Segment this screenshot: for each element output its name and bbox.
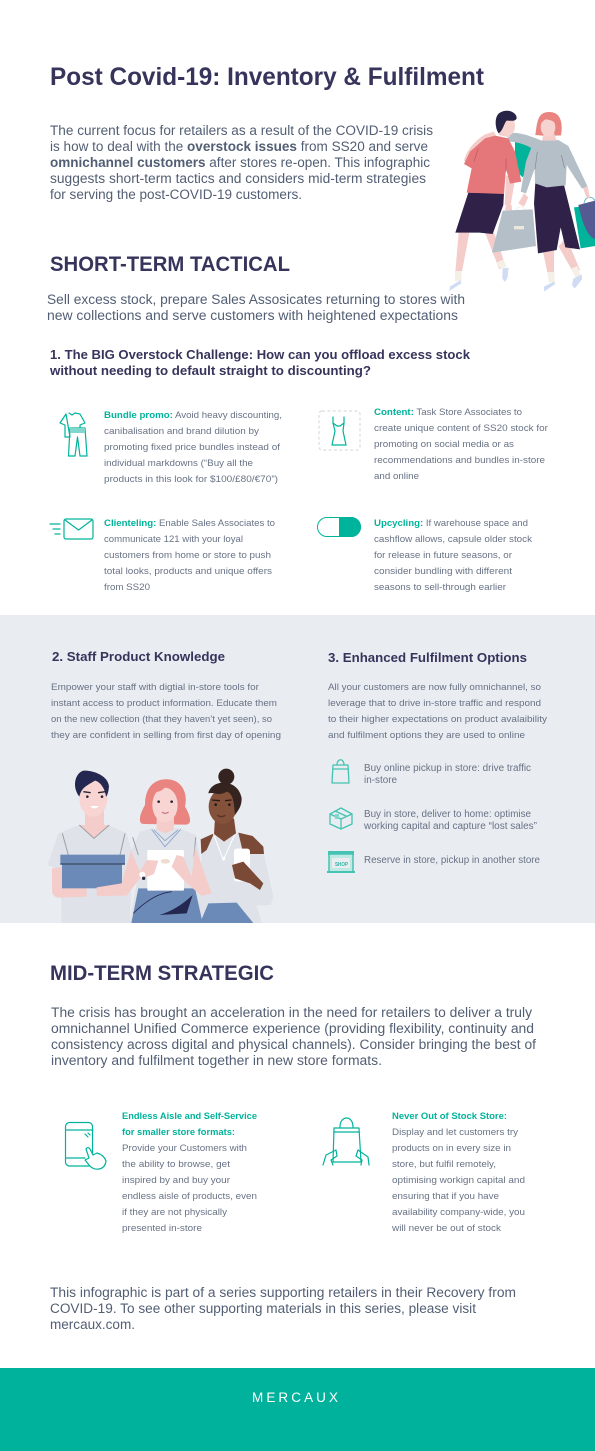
text: reserve in store: Reserve in store, pickup in another store (364, 855, 540, 866)
text: upcycling: seasons to sell-through earlier (374, 582, 506, 593)
text: buy online pickup in store: in-store (364, 775, 397, 786)
text: endless aisle: endless aisle of products, even (122, 1191, 257, 1202)
text: buy online pickup in store (364, 763, 531, 786)
man: arms and box (52, 867, 87, 898)
text: staff knowledge body: on the new collection (that they haven’t yet seen), so (51, 714, 272, 725)
woman's arms (518, 193, 528, 207)
woman on right: skirt (200, 903, 253, 923)
text: upcycling: cashflow allows, capsule older stock (374, 534, 532, 545)
text: upcycling: consider bundling with different (374, 566, 512, 577)
icon: shopping bag (332, 760, 349, 783)
intro text block: for serving the post-COVID-19 customers. (50, 187, 302, 202)
text: staff knowledge body (51, 682, 281, 741)
man's t-shirt (464, 136, 521, 194)
text: endless aisle: Endless Aisle and Self-Service (122, 1111, 257, 1122)
illustration: three staff members (47, 769, 273, 923)
text: bundle promo: individual markdowns (“Buy all the (104, 458, 253, 469)
closing note: mercaux.com. (50, 1317, 135, 1332)
heading: staff product knowledge: 2. Staff Product Knowledge (52, 650, 225, 664)
man's neck and head (499, 127, 510, 137)
text: content: create unique content of SS20 stock for (374, 423, 548, 434)
intro text block: The current focus for retailers as a result of the COVID-19 crisis (50, 123, 433, 138)
mid-term body text: The crisis has brought an acceleration in the need for retailers to deliver a truly (51, 1005, 532, 1020)
text: never out of stock: ensuring that if you have (392, 1191, 499, 1202)
man's hair (496, 111, 517, 133)
icon: shopping bag held in hands (323, 1118, 369, 1165)
text: clienteling: communicate 121 with your loyal (104, 534, 243, 545)
man's left arm (505, 175, 515, 205)
mid-term body text: omnichannel Unified Commerce experience (providing flexibility, continuity and (51, 1021, 534, 1036)
text: endless aisle: Provide your Customers with (122, 1143, 247, 1154)
mid-term body text: consistency across digital and physical channels). Consider bringing the best of (51, 1037, 536, 1052)
text: upcycling: Upcycling: If warehouse space and (374, 518, 528, 529)
short-term summary: new collections and serve customers with heightened expectations (47, 308, 458, 323)
text: clienteling: Clienteling: Enable Sales Associates to (104, 518, 275, 529)
centre woman: tablet and hands (147, 850, 184, 891)
text: staff knowledge body: instant access to product information. Educate them (51, 698, 277, 709)
closing note: COVID-19. To see other supporting materials in this series, please visit (50, 1301, 476, 1316)
text: content: and online (374, 471, 419, 482)
text: fulfilment body: and fulfilment options they are used to online (328, 730, 525, 741)
footer band with logo (0, 1368, 595, 1451)
text: content: promoting on social media or as (374, 439, 514, 450)
illustration: two shoppers with bags (449, 111, 595, 292)
woman's fringe (540, 117, 558, 127)
text: bundle promo: Bundle promo: Avoid heavy discounting, (104, 410, 282, 421)
short-term summary (47, 292, 465, 323)
woman's hair back (535, 112, 562, 136)
woman's raised arm (507, 133, 542, 152)
text: endless aisle (122, 1111, 257, 1234)
intro text block (50, 123, 433, 202)
woman on right: body (197, 833, 273, 923)
text: buy in store deliver to home: Buy in store, deliver to home: optimise (364, 809, 531, 820)
heading: mid-term strategic: MID-TERM STRATEGIC (50, 962, 274, 985)
text: fulfilment body: to their higher expectations on product avalaibility (328, 714, 547, 725)
heading: short-term tactical: SHORT-TERM TACTICAL (50, 253, 290, 276)
title: Post Covid-19: Inventory & Fulfilment (50, 63, 485, 91)
text: endless aisle: presented in-store (122, 1223, 202, 1234)
text: buy in store deliver to home (363, 809, 537, 832)
icon: dashed frame with dress (319, 411, 360, 450)
text: buy in store deliver to home: working capital and capture “lost sales” (363, 821, 537, 832)
woman's skirt (534, 183, 580, 253)
text: never out of stock: optimising workign capital and (392, 1175, 525, 1186)
man: body (47, 825, 132, 923)
icon: parcel box (330, 808, 352, 829)
shopping bag held by man (492, 209, 536, 253)
man's shoes (449, 280, 461, 291)
text: fulfilment body (328, 682, 547, 741)
centre woman: skirt (131, 888, 203, 923)
text: endless aisle: the ability to browse, get (122, 1159, 230, 1170)
woman's neck and head (542, 133, 557, 141)
text: staff knowledge body: they are confident in selling from first day of opening (51, 730, 281, 741)
heading: enhanced fulfilment options: 3. Enhanced Fulfilment Options (328, 651, 527, 665)
text: bundle promo: promoting fixed price bundles instead of (104, 442, 280, 453)
text: never out of stock: Never Out of Stock Store: (392, 1111, 507, 1122)
footer band with logo: MERCAUX (252, 1390, 338, 1405)
text: endless aisle: if they are not physically (122, 1207, 227, 1218)
text: endless aisle: inspired by and buy your (122, 1175, 230, 1186)
woman on right: neck, head, hair (214, 818, 236, 842)
teal bag behind (515, 141, 532, 177)
intro text block: is how to deal with the overstock issues from SS20 and serve (50, 139, 428, 154)
mid-term body text: inventory and fulfilment together in new store formats. (51, 1053, 382, 1068)
text: bundle promo: products in this look for $100/£80/€70”) (104, 474, 278, 485)
text: upcycling: for release in future seasons, or (374, 550, 512, 561)
centre woman: neck, head, hair (140, 779, 190, 825)
text: never out of stock: availability company-wide, you (392, 1207, 525, 1218)
text: clienteling: customers from home or store to push (104, 550, 271, 561)
centre woman: body (130, 828, 202, 923)
text: endless aisle: for smaller store formats: (122, 1127, 235, 1138)
woman on right: phone and arm (234, 849, 250, 881)
mid-term body text (51, 1005, 536, 1068)
woman's sweater (521, 140, 587, 193)
subheading: overstock challenge: without needing to default straight to discounting? (49, 364, 371, 378)
text: staff knowledge body: Empower your staff with digtial in-store tools for (51, 682, 259, 693)
subheading: overstock challenge (49, 348, 470, 378)
text: fulfilment body: leverage that to drive in-store traffic and respond (328, 698, 541, 709)
man's shorts (455, 193, 504, 234)
text: content: recommendations and bundles in-store (374, 455, 545, 466)
icon: shop front (327, 851, 355, 873)
text: content: Content: Task Store Associates to (374, 407, 522, 418)
icon: half-filled pill (318, 517, 361, 537)
icon: shop front: SHOP (335, 862, 349, 868)
icon: t-shirt and trousers (60, 413, 87, 456)
panel: staff knowledge and fulfilment (0, 615, 595, 923)
man: neck, head, hair (85, 810, 104, 833)
closing note (50, 1285, 516, 1332)
man's legs (455, 233, 469, 272)
text: clienteling (104, 518, 275, 593)
text: fulfilment body: All your customers are now fully omnichannel, so (328, 682, 541, 693)
woman's shoes (544, 281, 555, 292)
intro text block: suggests short-term tactics and considers mid-term strategies (50, 171, 426, 186)
text: content (374, 407, 548, 482)
text: bundle promo: canibalisation and brand dilution by (104, 426, 259, 437)
right bags (574, 205, 595, 248)
text: buy online pickup in store: Buy online pickup in store: drive traffic (364, 763, 531, 774)
man: front arm (97, 850, 142, 896)
text: never out of stock (391, 1111, 525, 1234)
closing note: This infographic is part of a series supporting retailers in their Recovery from (50, 1285, 516, 1300)
icon: phone with tapping hand (66, 1122, 106, 1169)
man's raised arm (464, 132, 497, 165)
text: clienteling: from SS20 (104, 582, 150, 593)
short-term summary: Sell excess stock, prepare Sales Assosicates returning to stores with (47, 292, 465, 307)
text: never out of stock: will never be out of stock (391, 1223, 501, 1234)
text: never out of stock: products on in every size in (392, 1143, 511, 1154)
text: bundle promo (104, 410, 282, 485)
icon: envelope with speed lines (50, 519, 93, 539)
text: never out of stock: Display and let customers try (392, 1127, 518, 1138)
intro text block: omnichannel customers after stores re-open. This infographic (50, 155, 430, 170)
text: upcycling (374, 518, 532, 593)
woman's legs (543, 250, 554, 273)
text: clienteling: total looks, products and unique offers (104, 566, 272, 577)
text: never out of stock: store, but fulfil remotely, (392, 1159, 496, 1170)
subheading: overstock challenge: 1. The BIG Overstock Challenge: How can you offload excess stock (50, 348, 470, 362)
